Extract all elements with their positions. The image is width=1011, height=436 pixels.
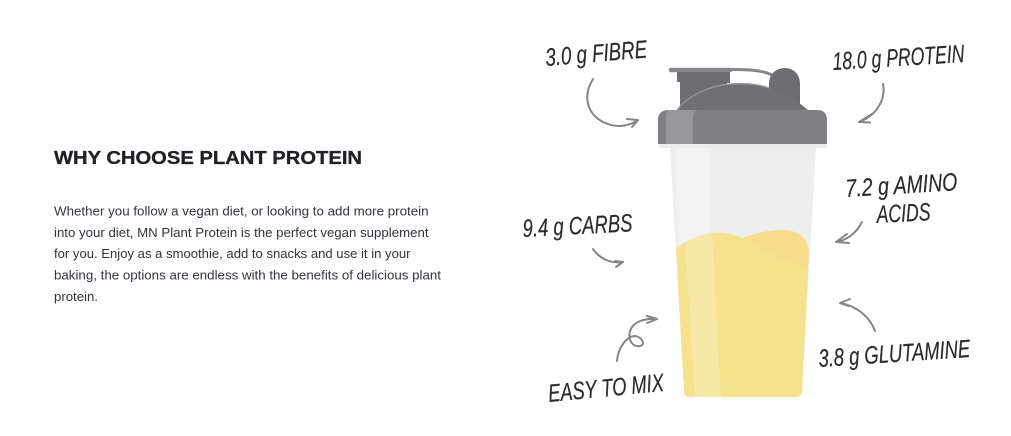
- label: 7.2 g amino acids: 7.2 g AMINO: [845, 168, 958, 203]
- text block: description: for you. Enjoy as a smoothie, add to snacks and use it in your: [54, 246, 411, 261]
- label: 7.2 g amino acids: ACIDS: [874, 198, 931, 229]
- title: WHY CHOOSE PLANT PROTEIN: [54, 148, 362, 168]
- lid flip bar: [671, 70, 772, 75]
- lid back block: [677, 72, 730, 110]
- label: 7.2 g amino acids: [845, 168, 958, 229]
- shaker cup: [670, 148, 816, 397]
- liquid highlight: [685, 233, 721, 397]
- lid band highlight: [666, 110, 697, 144]
- arrow: carbs: [593, 249, 623, 267]
- label: easy to mix: EASY TO MIX: [547, 369, 666, 408]
- label: 9.4 g carbs: 9.4 g CARBS: [522, 209, 633, 243]
- lid band: [658, 110, 827, 144]
- arrow: protein: [859, 84, 884, 122]
- text block: description: [54, 204, 441, 304]
- icon: protein shaker: [658, 68, 827, 397]
- text block: description: protein.: [54, 289, 98, 304]
- arrow: fibre: [587, 79, 638, 127]
- text block: description: baking, the options are endless with the benefits of delicious plant: [54, 268, 441, 282]
- lid dome: [677, 84, 809, 111]
- liquid: [676, 230, 809, 397]
- cup highlight: [675, 148, 710, 246]
- liquid shade: [745, 230, 808, 268]
- lid rim: [659, 144, 827, 148]
- arrow: amino acids: [836, 222, 862, 243]
- text block: description: Whether you follow a vegan diet, or looking to add more protein: [54, 204, 428, 218]
- text block: description: into your diet, MN Plant Protein is the perfect vegan supplement: [54, 225, 429, 240]
- label: 3.0 g fibre: 3.0 g FIBRE: [544, 36, 648, 72]
- arrow: mix: [617, 316, 657, 361]
- lid knob: [769, 68, 800, 112]
- arrow: glutamine: [840, 299, 875, 331]
